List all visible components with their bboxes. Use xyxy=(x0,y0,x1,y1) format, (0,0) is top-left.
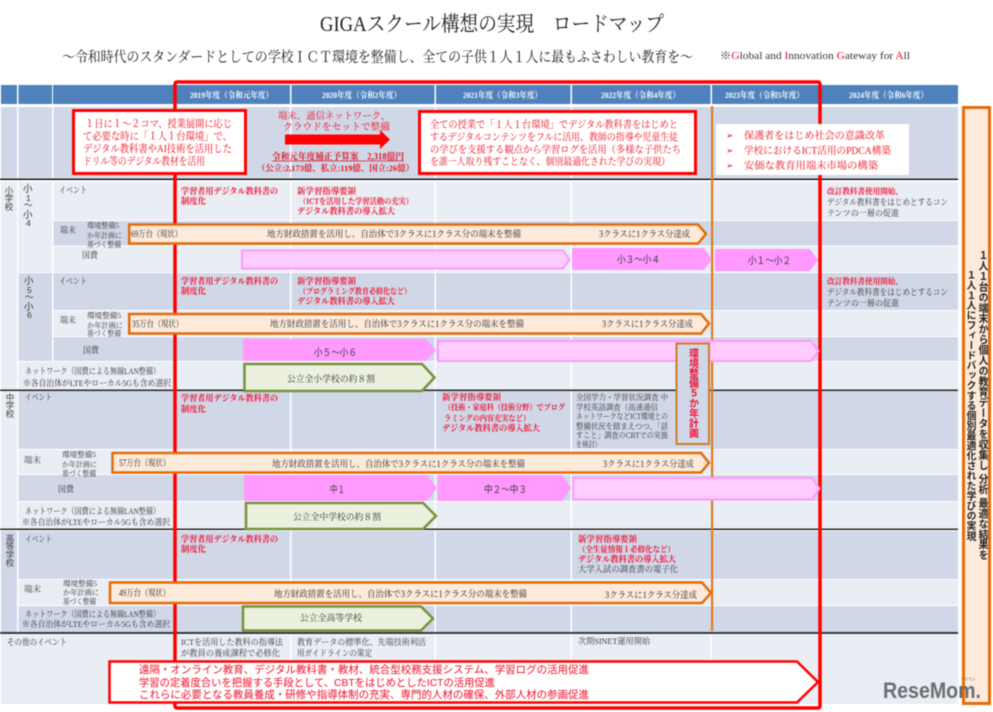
section: elementary grades 5-6: 端末 xyxy=(60,315,76,325)
section: high school: 学習者用デジタル教科書の xyxy=(181,534,278,544)
section: elementary grades 1-4 xyxy=(4,184,948,271)
section: junior high school: 基づく整備 xyxy=(62,468,96,478)
logo: ReseMom: リセマム xyxy=(961,676,975,681)
section: other events xyxy=(7,636,650,658)
arrow: network coverage xyxy=(243,606,433,630)
section: junior high school: デジタル教科書の導入拡大 xyxy=(442,423,540,433)
section: high school: （全生徒情報Ⅰ必修化など） xyxy=(578,544,675,554)
arrow: device rollout: 3クラスに1クラス分達成 xyxy=(603,458,694,469)
arrow: second and third year xyxy=(438,475,571,501)
label: grades 5 to 6: 小 xyxy=(24,302,34,313)
callout: society-wide items: 保護者をはじめ社会の意識改革 xyxy=(744,129,885,142)
callout: budget and device, network, cloud: 端末、通信ネットワーク、 xyxy=(278,109,390,122)
section: elementary grades 1-4: デジタル教科書の導入拡大 xyxy=(297,206,395,216)
arrow: network coverage: 公立全中学校の約８割 xyxy=(293,511,381,522)
section: junior high school: 学習者用デジタル教科書の xyxy=(181,393,278,403)
arrow: first year xyxy=(244,475,437,501)
arrow: grades 1-2: 小１～小２ xyxy=(748,255,791,267)
GIGA acronym note: ※Global and Innovation Gateway for All xyxy=(720,51,910,62)
section: other events: ICTを活用した教科の指導法 xyxy=(181,637,283,647)
orange vertical line: end of 5-year plan xyxy=(711,106,713,631)
section: elementary grades 5-6: 改訂教科書使用開始、 xyxy=(827,276,903,286)
callout: all classes use one device per child: を誰一人取り残すことなく、個別最適化された学びの実現） xyxy=(430,155,670,168)
section: elementary grades 1-4: デジタル教科書をはじめとするコン xyxy=(827,197,948,207)
label: grades 5 to 6: ～ xyxy=(25,292,34,302)
section: high school: 新学習指導要領 xyxy=(578,534,637,544)
arrow: red right xyxy=(285,130,390,149)
section: elementary grades 1-4: 端末 xyxy=(60,225,76,235)
section: elementary grades 1-4: 改訂教科書使用開始、 xyxy=(827,186,903,196)
section: elementary grades 1-4: イベント xyxy=(59,185,87,195)
section: elementary grades 5-6 xyxy=(23,276,948,391)
section: junior high school: 新学習指導要領 xyxy=(442,392,501,402)
section: high school xyxy=(5,533,711,630)
section: high school: 端末 xyxy=(24,584,41,594)
arrow: device rollout: 3クラスに1クラス分達成 xyxy=(602,318,693,329)
arrow callout: bottom promotion items xyxy=(110,662,818,702)
section: elementary grades 5-6: 国費 xyxy=(83,345,99,355)
label: grades 1 to 4: 4 xyxy=(26,218,31,228)
arrow: device rollout xyxy=(129,224,706,244)
callout: one device daily use: １日に１～２コマ、授業展開に応じ xyxy=(85,117,232,130)
section: high school: ネットワーク（国費による無線LAN整備） xyxy=(25,609,160,619)
section: junior high school: 端末 xyxy=(24,455,41,465)
section: elementary grades 5-6: 新学習指導要領 xyxy=(297,276,356,286)
section: junior high school: イベント xyxy=(25,392,52,402)
section: elementary grades 1-4: 制度化 xyxy=(181,196,206,206)
table header row: 2022年度（令和4年度） xyxy=(601,89,680,100)
arrow: light pink span xyxy=(438,341,818,361)
callout: one device daily use: て必要な時に「１人１台環境」で、 xyxy=(83,130,232,142)
section: junior high school: ネットワークなどICT環境との xyxy=(576,411,668,421)
arrow: device rollout: 49万台（現状） xyxy=(119,587,170,598)
section: junior high school: ※各自治体がLTEやローカル5Gも含め選択 xyxy=(22,517,170,527)
right panel: vertical summary: １人１台の端末から個人の教育データを収集し 分析 最適な結果を xyxy=(976,250,988,560)
callout: one device daily use: ドリル等のデジタル教材を活用 xyxy=(83,154,205,168)
section: elementary grades 5-6: 学習者用デジタル教科書の xyxy=(181,276,278,286)
arrow: first year: 中１ xyxy=(330,483,345,496)
vertical box: 5-year environment plan: 環境整備５か年計画 xyxy=(687,348,699,439)
callout: society-wide items xyxy=(716,124,909,175)
arrow: device rollout: 3クラスに1クラス分達成 xyxy=(599,228,690,239)
right panel: vertical summary: １人１人にフィードバックする個別最適化された学びの実現 xyxy=(964,270,976,542)
label: grades 5 to 6: 小 xyxy=(24,276,34,287)
arrow: light pink span xyxy=(242,250,570,268)
label: grades 5 to 6: 5 xyxy=(27,285,32,295)
label: grades 1 to 4: ～ xyxy=(24,200,33,210)
subtitle: ～令和時代のスタンダードとしての学校ＩＣＴ環境を整備し、全ての子供１人１人に最もふさわしい教育を～ xyxy=(62,48,693,66)
section: high school: 制度化 xyxy=(181,544,206,554)
section: junior high school: 整備状況を踏まえつつ、「話 xyxy=(576,421,668,431)
arrow: device rollout: 3クラスに1クラス分達成 xyxy=(605,589,697,600)
section: elementary grades 5-6: 制度化 xyxy=(181,286,206,296)
section: elementary grades 5-6: （プログラミング教育必修化など） xyxy=(299,286,411,296)
arrow: grades 3-4 xyxy=(572,248,712,270)
section: junior high school xyxy=(5,392,820,529)
arrow: grades 1-2 xyxy=(715,249,818,271)
callout: society-wide items: 学校におけるICT活用のPDCA構築 xyxy=(744,144,891,157)
arrow: network coverage xyxy=(246,503,436,529)
arrow: device rollout xyxy=(110,582,711,603)
section: elementary grades 5-6: テンツの一層の促進 xyxy=(827,298,899,308)
section: junior high school: ネットワーク（国費による無線LAN整備） xyxy=(25,506,160,516)
callout: budget and device, network, cloud: 令和元年度補正予算案 2,318億円 xyxy=(272,150,404,162)
logo: ReseMom: ReseMom. xyxy=(883,678,981,703)
section: junior high school: を検討） xyxy=(576,439,601,449)
title: GIGAスクール構想の実現 ロードマップ xyxy=(320,12,664,36)
right panel: vertical summary xyxy=(964,108,990,704)
arrow: grades 3-4: 小３～小４ xyxy=(617,254,660,266)
arrow: device rollout: 地方財政措置を活用し、自治体で3クラスに1クラス分の端末を整備 xyxy=(270,318,524,329)
section: elementary grades 1-4: テンツの一層の促進 xyxy=(827,208,899,218)
section: other events: 次期SINET運用開始 xyxy=(578,636,650,646)
arrow: device rollout: 地方財政措置を活用し、自治体で3クラスに1クラス分の端末を整備 xyxy=(274,588,527,599)
section: high school: 環境整備5 xyxy=(63,578,97,588)
callout: one device daily use: デジタル教科書やAI技術を活用した xyxy=(83,142,232,155)
arrow: network coverage: 公立全高等学校 xyxy=(300,612,363,623)
section: elementary grades 5-6: デジタル教科書の導入拡大 xyxy=(297,296,395,306)
callout: budget and device, network, cloud xyxy=(257,109,414,173)
section: elementary grades 1-4: か年計画に xyxy=(87,230,122,240)
vertical box: 5-year environment plan xyxy=(676,344,709,444)
section: elementary grades 5-6: 基づく整備 xyxy=(87,328,121,338)
section: other events: 用ガイドラインの策定 xyxy=(297,648,372,658)
callout: budget and device, network, cloud: クラウドをセットで整備 xyxy=(283,120,390,133)
label: grades 1 to 4 xyxy=(23,184,33,228)
table header row: 2023年度（令和5年度） xyxy=(725,89,804,100)
arrow: device rollout: 35万台（現状） xyxy=(132,318,183,329)
arrow: grades 5-6: 小５～小６ xyxy=(314,347,357,359)
section: other events: 教育データの標準化、先端技術利活 xyxy=(297,637,426,647)
arrow callout: bottom promotion items: 遠隔・オンライン教育、デジタル教科書・教材、統合型校務支援システム、学習ログの活用促進 xyxy=(139,663,589,676)
arrow: device rollout: 69万台（現状） xyxy=(131,228,182,239)
section: high school: ※各自治体がLTEやローカル5Gも含め選択 xyxy=(22,619,170,629)
arrow: network coverage: 公立全小学校の約８割 xyxy=(287,373,375,384)
arrow: network coverage xyxy=(244,364,434,391)
callout: budget and device, network, cloud: （公立:2,173億、私立:119億、国立:26億） xyxy=(257,163,414,173)
section: junior high school: 制度化 xyxy=(181,404,206,414)
section: junior high school: 環境整備5 xyxy=(62,449,96,459)
section: junior high school: 国費 xyxy=(58,484,74,494)
callout: all classes use one device per child: するデジタルコンテンツをフルに活用、教師の指導や児童生徒 xyxy=(430,130,678,144)
callout: society-wide items: ➢ xyxy=(726,146,734,156)
section: elementary grades 5-6: ※各自治体がLTEやローカル5Gも含め選択 xyxy=(23,378,171,388)
label: grades 1 to 4: 1 xyxy=(26,193,31,203)
label: elementary school: 小学校 xyxy=(4,185,14,212)
arrow: device rollout xyxy=(112,453,709,472)
section: junior high school: 学校英語調査（高速通信 xyxy=(576,402,658,412)
section: elementary grades 1-4: 新学習指導要領 xyxy=(297,186,356,196)
arrow: light pink span xyxy=(573,478,820,500)
label: junior high: 中学校 xyxy=(5,392,15,419)
table header row: 2021年度（令和3年度） xyxy=(463,89,542,100)
section: elementary grades 1-4: 基づく整備 xyxy=(87,239,121,249)
table header row: 2020年度（令和2年度） xyxy=(322,89,401,100)
section: elementary grades 5-6: 環境整備5 xyxy=(87,310,121,320)
arrow: device rollout: 地方財政措置を活用し、自治体で3クラスに1クラス分の端末を整備 xyxy=(272,458,525,469)
section: high school: デジタル教科書の導入拡大 xyxy=(578,554,676,564)
arrow callout: bottom promotion items: これらに必要となる教員養成・研修や指導体制の充実、専門的人材の確保、外部人材の参画促進 xyxy=(139,688,589,701)
section: junior high school: （技術・家庭科（技術分野）でプログ xyxy=(444,402,565,412)
section: high school: 大学入試の調査書の電子化 xyxy=(578,564,678,574)
section: elementary grades 5-6: デジタル教科書をはじめとするコン xyxy=(827,287,948,297)
section: junior high school: 全国学力・学習状況調査 中 xyxy=(576,392,668,402)
arrow: second and third year: 中２～中３ xyxy=(484,483,527,496)
section: high school: 基づく整備 xyxy=(63,596,96,606)
arrow: device rollout: 地方財政措置を活用し、自治体で3クラスに1クラス分の端末を整備 xyxy=(267,228,521,239)
section: junior high school: か年計画に xyxy=(62,459,97,469)
callout: all classes use one device per child: の学びを支援する観点から学習ログを活用（多様な子供たち xyxy=(430,143,681,156)
section: high school: か年計画に xyxy=(63,587,99,597)
section: elementary grades 1-4: 学習者用デジタル教科書の xyxy=(181,186,278,196)
section: high school: イベント xyxy=(25,534,52,544)
section: elementary grades 5-6: ネットワーク（国費による無線LAN整備） xyxy=(25,366,160,376)
callout: society-wide items: ➢ xyxy=(726,130,734,140)
table header row: 2024年度（令和6年度） xyxy=(849,89,928,100)
section: other events: が教員の養成課程で必修化 xyxy=(181,648,280,658)
table header row xyxy=(1,85,958,104)
section: other events: その他のイベント xyxy=(7,637,67,647)
section: junior high school: すこと」調査のCBTでの実施 xyxy=(576,430,668,440)
section: elementary grades 1-4: 国費 xyxy=(82,250,98,260)
section: junior high school: ラミングの内容充実など） xyxy=(444,413,530,423)
section: elementary grades 5-6: か年計画に xyxy=(87,320,123,330)
section: elementary grades 1-4: （ICTを活用した学習活動の充実） xyxy=(299,196,413,206)
label: high school: 高等学校 xyxy=(5,533,15,568)
label: grades 5 to 6: 6 xyxy=(27,310,32,320)
section: elementary grades 5-6: イベント xyxy=(59,276,87,286)
label: grades 1 to 4: 小 xyxy=(23,184,33,195)
table header row: 2019年度（令和元年度） xyxy=(190,89,273,100)
callout: all classes use one device per child xyxy=(420,112,696,174)
callout: society-wide items: ➢ xyxy=(726,160,734,170)
label: grades 1 to 4: 小 xyxy=(23,210,33,221)
callout: one device daily use xyxy=(74,110,246,174)
arrow: grades 5-6 xyxy=(243,339,436,361)
arrow: device rollout xyxy=(129,314,709,334)
callout: society-wide items: 安価な教育用端末市場の構築 xyxy=(744,159,878,172)
arrow callout: bottom promotion items: 学習の定着度合いを把握する手段として、CBTをはじめとしたICTの活用促進 xyxy=(139,676,495,689)
arrow: device rollout: 57万台（現状） xyxy=(119,457,170,468)
label: grades 5 to 6 xyxy=(24,276,34,320)
section: elementary grades 1-4: 環境整備5 xyxy=(87,220,119,230)
red outline: first three years period xyxy=(175,82,820,708)
callout: all classes use one device per child: 全ての授業で「１人１台環境」でデジタル教科書をはじめと xyxy=(430,118,678,131)
